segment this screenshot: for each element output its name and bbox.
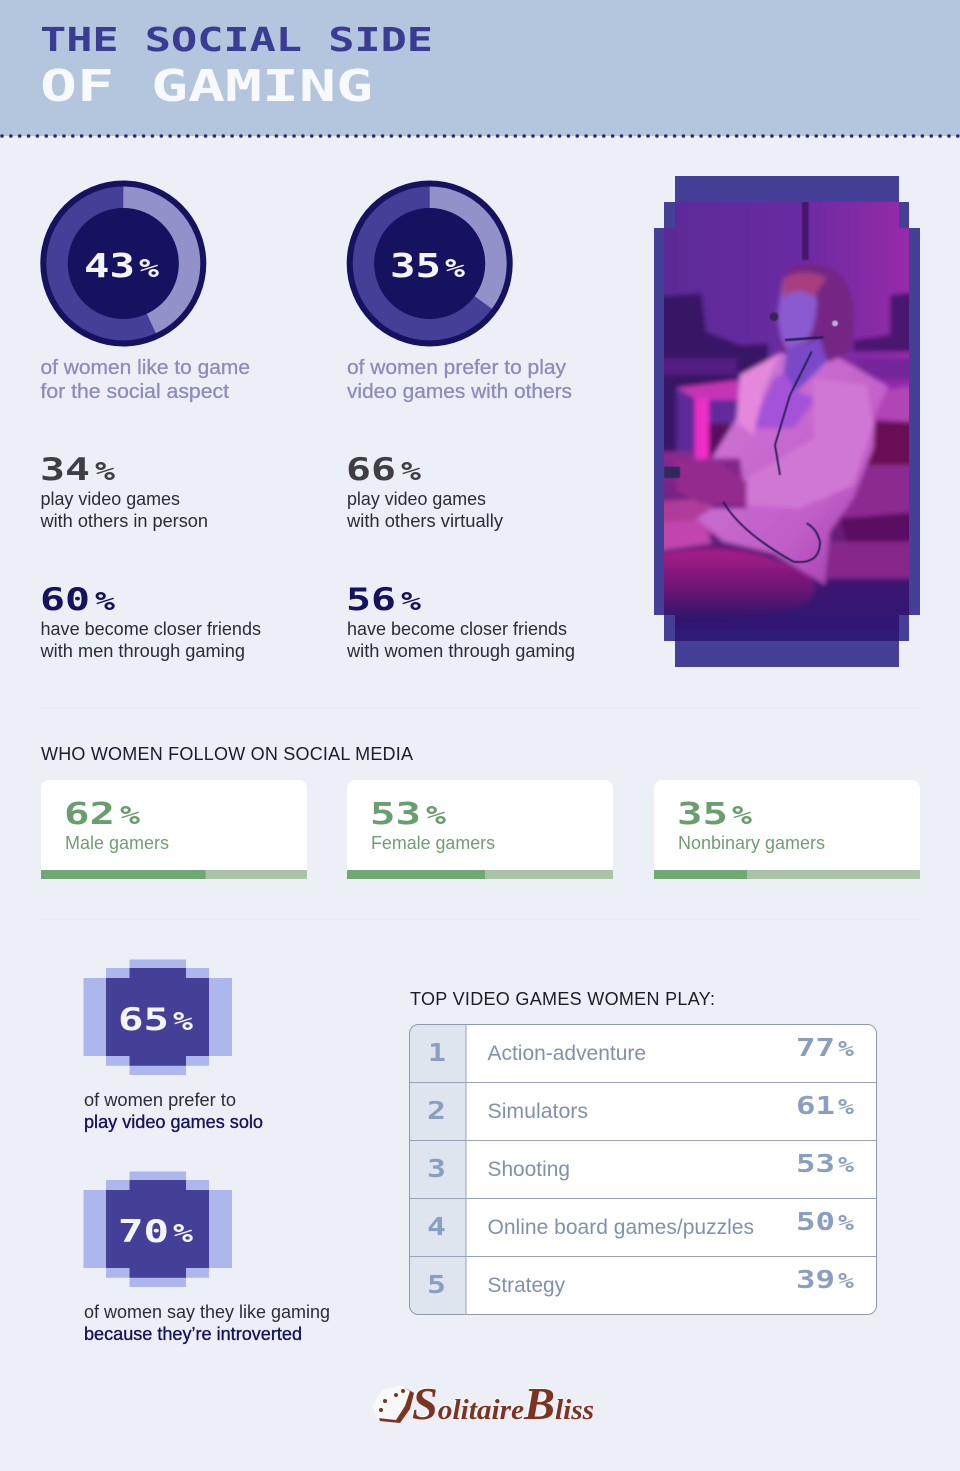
card: male gamers: 62	[64, 797, 115, 832]
row 4: 50	[796, 1207, 835, 1236]
stat: 34% in person: with others in person	[39, 511, 208, 531]
stat: 60% closer with men: have become closer friends	[40, 619, 261, 639]
caption: solo play: of women prefer to	[84, 1090, 236, 1110]
card: female gamers	[347, 780, 613, 879]
heading: who women follow: WHO WOMEN FOLLOW ON SOCIAL MEDIA	[41, 744, 413, 764]
pixel badge: 65% solo	[84, 960, 232, 1075]
title line two: OF GAMING	[40, 61, 373, 112]
card: male gamers	[41, 780, 307, 879]
stat: 60% closer with men	[39, 582, 261, 661]
row 1	[428, 1033, 854, 1067]
card: male gamers: %	[120, 801, 140, 831]
caption: solo play	[84, 1090, 263, 1132]
stat: 66% virtually: 66	[346, 452, 396, 488]
stat: 56% closer with women: 56	[346, 582, 396, 618]
wordmark: SolitaireBliss	[412, 1378, 594, 1429]
pixel badge: 70% introverted	[84, 1172, 232, 1287]
caption: introverted: of women say they like gaming	[84, 1302, 330, 1322]
photo: woman gaming under purple light	[664, 202, 909, 641]
stat: 34% in person: play video games	[40, 489, 180, 509]
dotted header border	[2, 134, 960, 138]
row 5	[427, 1265, 854, 1299]
header banner	[0, 0, 960, 136]
pixel badge: 70% introverted: 70	[118, 1214, 169, 1250]
stat: 66% virtually: play video games	[347, 489, 486, 509]
stat: 56% closer with women: %	[401, 587, 421, 617]
stat: 60% closer with men: %	[95, 587, 115, 617]
card: nonbinary gamers	[654, 780, 920, 879]
caption: social aspect: of women like to game	[40, 357, 250, 379]
stat: 60% closer with men: 60	[40, 582, 90, 618]
stat: 34% in person	[39, 452, 208, 531]
caption: social aspect: for the social aspect	[40, 381, 229, 403]
row 3	[427, 1149, 854, 1183]
row 2: Simulators	[488, 1100, 588, 1123]
donut chart: 43%: 43	[84, 246, 135, 285]
donut chart: 35%: 35	[390, 246, 441, 285]
row 4	[427, 1207, 854, 1241]
row 1: Action-adventure	[488, 1042, 646, 1065]
pixel badge: 65% solo: 65	[118, 1002, 169, 1038]
divider	[40, 918, 920, 920]
pixel badge: 70% introverted: %	[173, 1219, 193, 1249]
row 1: 1	[428, 1038, 446, 1067]
row 4: Online board games/puzzles	[488, 1216, 754, 1239]
caption: solo play: play video games solo	[84, 1112, 263, 1132]
stat: 56% closer with women	[346, 582, 575, 661]
card: nonbinary gamers: Nonbinary gamers	[678, 833, 825, 853]
heading: top video games: TOP VIDEO GAMES WOMEN PLAY:	[410, 989, 715, 1009]
stat: 60% closer with men: with men through gaming	[39, 641, 245, 661]
stat: 66% virtually: %	[401, 457, 421, 487]
divider	[40, 707, 920, 709]
row 2: %	[838, 1095, 854, 1119]
stat: 56% closer with women: have become closer friends	[347, 619, 567, 639]
caption: introverted	[84, 1302, 330, 1344]
caption: prefer to play with others	[347, 357, 572, 403]
pixel badge: 65% solo: %	[173, 1007, 193, 1037]
stat: 56% closer with women: with women through gaming	[346, 641, 575, 661]
icon: fan of cards	[372, 1385, 414, 1423]
row 2: 2	[427, 1096, 446, 1125]
row 1: 77	[796, 1033, 835, 1062]
row 3: Shooting	[488, 1158, 570, 1181]
card: nonbinary gamers: %	[732, 801, 752, 831]
row 2	[427, 1091, 854, 1125]
donut chart: 35%: %	[445, 254, 465, 284]
title line one: THE SOCIAL SIDE	[40, 20, 433, 59]
stat: 34% in person: %	[95, 457, 115, 487]
row 1: %	[838, 1037, 854, 1061]
card: female gamers: %	[426, 801, 446, 831]
caption: social aspect	[40, 357, 250, 403]
donut chart: 35%	[347, 180, 513, 346]
row 5: 39	[796, 1265, 835, 1294]
caption: introverted: because they’re introverted	[84, 1324, 302, 1344]
row 3: 53	[796, 1149, 835, 1178]
donut chart: 43%	[40, 180, 206, 346]
row 2: 61	[796, 1091, 835, 1120]
row 3: %	[838, 1153, 854, 1177]
row 4: 4	[427, 1212, 446, 1241]
logo: Solitaire Bliss	[372, 1378, 594, 1429]
card: nonbinary gamers: 35	[677, 797, 728, 832]
stat: 34% in person: 34	[40, 452, 90, 488]
row 5: 5	[427, 1270, 446, 1299]
card: female gamers: Female gamers	[371, 833, 495, 853]
caption: prefer to play with others: of women prefer to play	[347, 357, 566, 379]
card: male gamers: Male gamers	[65, 833, 169, 853]
caption: prefer to play with others: video games with others	[347, 381, 572, 403]
card: female gamers: 53	[370, 797, 421, 832]
stat: 66% virtually: with others virtually	[346, 511, 503, 531]
donut chart: 43%: %	[139, 254, 159, 284]
stat: 66% virtually	[346, 452, 503, 531]
row 5: %	[838, 1269, 854, 1293]
table: top video games	[410, 1024, 876, 1314]
row 4: %	[838, 1211, 854, 1235]
row 3: 3	[427, 1154, 446, 1183]
pixel frame behind photo	[654, 176, 920, 667]
row 5: Strategy	[488, 1274, 565, 1297]
